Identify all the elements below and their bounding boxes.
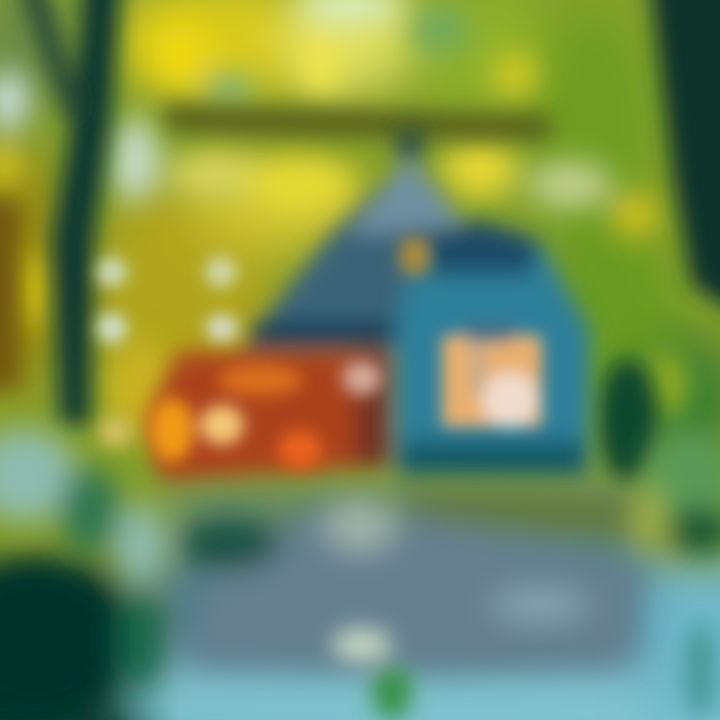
road xyxy=(190,500,640,670)
left mid foliage xyxy=(60,466,120,554)
wing light centre xyxy=(200,405,244,445)
bottom-left dark foliage xyxy=(0,560,125,720)
branch: horizontal beam xyxy=(160,105,550,140)
trees xyxy=(0,0,720,482)
roof: main slope xyxy=(248,160,445,345)
bottom green sprout xyxy=(372,664,412,720)
bottom pale glow xyxy=(332,627,392,663)
window mullion xyxy=(474,335,482,395)
wing light left xyxy=(150,398,194,462)
tree: left branch xyxy=(2,0,84,125)
gable top shade xyxy=(420,220,540,275)
window highlight xyxy=(482,372,538,428)
main window xyxy=(442,335,542,427)
left pale foliage xyxy=(0,429,75,521)
tree: left trunk xyxy=(52,0,124,425)
chimney xyxy=(396,130,424,158)
sunlight highlights in the canopy xyxy=(0,0,689,438)
roof: light ridge xyxy=(350,155,465,235)
tree: far-left trunk xyxy=(0,200,20,390)
tree: dark right background xyxy=(598,358,658,482)
foreground xyxy=(0,429,720,720)
roof: front gable xyxy=(395,222,590,470)
house front lower shade xyxy=(400,440,585,476)
light dots xyxy=(97,257,127,287)
tree: right trunk xyxy=(645,0,720,340)
house xyxy=(146,130,590,480)
dark shrub xyxy=(180,521,280,569)
pale pillar xyxy=(116,505,164,585)
roof: dark eave xyxy=(245,320,400,348)
attic window xyxy=(400,238,430,274)
right foliage xyxy=(645,430,720,530)
orange wing xyxy=(146,352,390,480)
wing window xyxy=(342,360,382,396)
window top shadow xyxy=(465,322,515,342)
bottom-left mid green xyxy=(118,590,162,690)
bottom right plant xyxy=(684,622,716,718)
lawn strip xyxy=(400,490,640,535)
wing dark edge xyxy=(355,355,390,465)
road highlight xyxy=(324,499,396,551)
details xyxy=(97,238,542,470)
wing glow xyxy=(278,430,322,470)
